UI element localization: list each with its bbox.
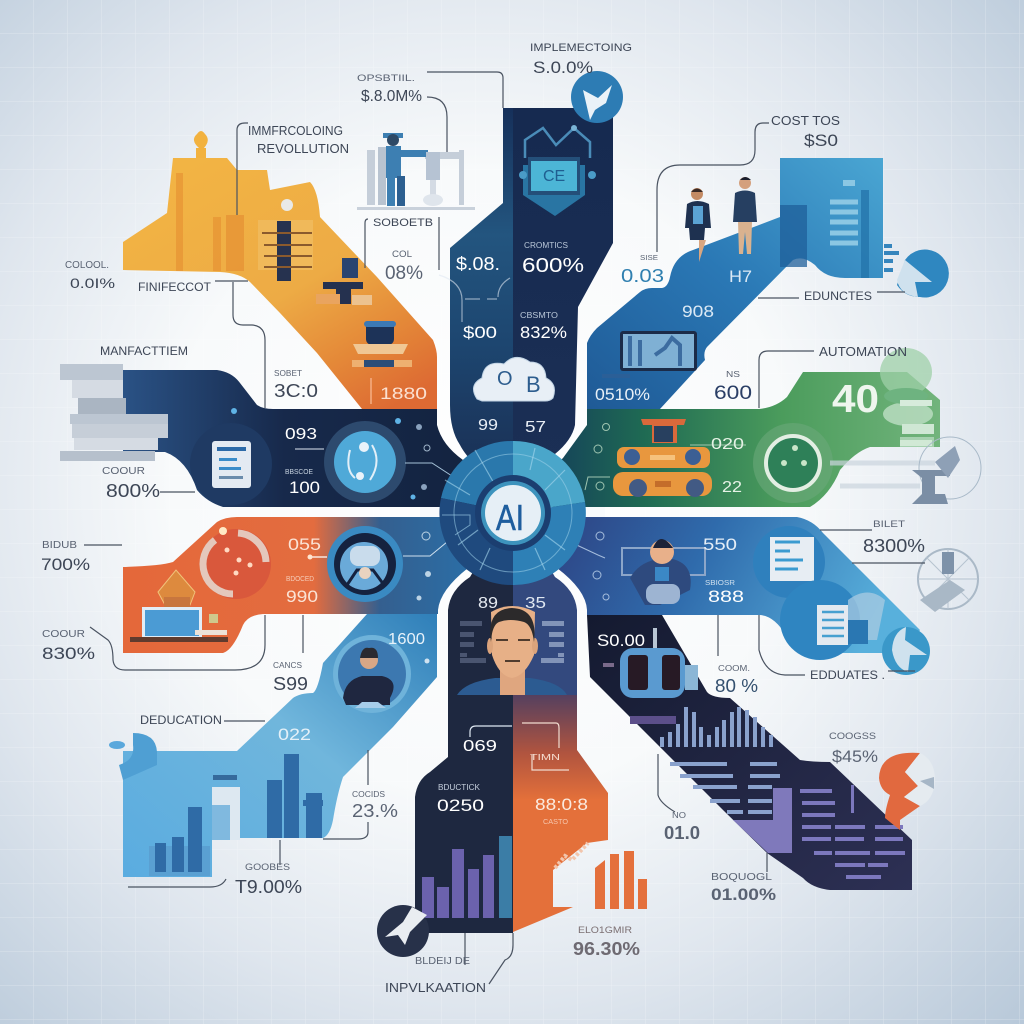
callout: col 08%: COL [392, 249, 412, 259]
values: 055, 990: BDOCED [286, 576, 314, 583]
mini bars right [541, 621, 564, 663]
value: 550, 888: 888 [708, 587, 744, 606]
callout: inpvlkaation: BLDEIJ DE [415, 956, 470, 967]
ring dots [566, 532, 609, 600]
callout: ns 600: NS [726, 370, 740, 379]
callout: col 08% [385, 249, 423, 284]
callout: coogss 45%: COOGSS [829, 731, 876, 742]
values: right column [520, 241, 584, 436]
values: right column: 57 [525, 419, 546, 436]
icon: pie badge, blue right [897, 249, 949, 297]
callout: canccs s99 [273, 615, 308, 694]
chart: purple bars [422, 836, 512, 918]
callout: boquogl 01.00%: BOQUOGL [711, 872, 773, 883]
callout: implementing: S.0.0% [533, 58, 593, 77]
value: 35: 35 [525, 595, 546, 612]
values: 069, 0250: 069 [463, 738, 497, 755]
callout: canccs s99: S99 [273, 674, 308, 694]
values: left column: $.08. [456, 254, 500, 274]
connector dots [231, 408, 452, 500]
icon: two people [685, 177, 757, 262]
callout: coom 80%: COOM. [718, 663, 750, 673]
callout: coom 80% [715, 615, 758, 696]
values: H7, 908, 0510%: 908 [682, 302, 714, 321]
callout: sobet 3c:0 [274, 369, 318, 401]
callout: coogss 45% [829, 731, 878, 766]
icon: VR headset [603, 628, 698, 698]
callout: colool: COLOOL. [65, 260, 109, 271]
callout: revolution: REVOLLUTION [257, 142, 349, 156]
values: 069, 0250: 0250 [437, 796, 484, 815]
values: right column: 832% [520, 323, 567, 342]
callout: edduates: EDDUATES . [810, 668, 885, 682]
callout: edunctes [758, 289, 905, 303]
icon: arrow badge, top [571, 71, 623, 123]
values: H7, 908, 0510% [595, 267, 752, 404]
icon: cloud: O [497, 368, 513, 390]
panel: right indigo arm [545, 517, 920, 660]
icon: document circle [190, 423, 272, 505]
white channels around hub [420, 507, 605, 517]
callout: implementing: IMPLEMECTOING [530, 42, 632, 54]
callout: bidub 700% [41, 540, 122, 574]
values: 1600, 022: 022 [278, 725, 311, 744]
ring dots [585, 424, 610, 490]
callout: bilet 8300%: 8300% [863, 536, 925, 556]
value: 89: 89 [478, 595, 498, 612]
values: 093 and 100: 100 [289, 478, 320, 497]
values: 88:0:8: TIMN [530, 753, 560, 762]
callout: bilet 8300% [820, 519, 925, 563]
ring dots [403, 532, 462, 600]
callout: implementing [530, 42, 632, 77]
chart: orange bars [595, 851, 647, 909]
values: 88:0:8: 88:0:8 [535, 795, 588, 814]
callout: sobet 3c:0: SOBET [274, 369, 302, 378]
panel: right blue arm [587, 158, 899, 409]
values: 020, 22, 40: 22 [722, 479, 742, 496]
center hub [439, 441, 586, 585]
chart: horizontal rows [630, 716, 905, 879]
panel: top center arm, right half [473, 108, 613, 470]
callout: no 01.0: 01.0 [664, 823, 700, 843]
callout: coccids 23.%: COCIDS [352, 790, 385, 799]
values: left column: $00 [463, 323, 497, 342]
callout: colool [65, 260, 115, 291]
callout: finifeccot: FINIFECCOT [138, 280, 212, 294]
panel: bottom center arm, right half [513, 560, 608, 932]
callout: manfactiem: MANFACTTIEM [100, 344, 188, 358]
values: 069, 0250 [437, 726, 512, 815]
callout: bilet 8300%: BILET [873, 519, 906, 529]
icon: robot helmet on stack [352, 321, 412, 367]
callout: opsbtiil: $.8.0M% [361, 88, 422, 105]
icon: helmet circle [327, 526, 403, 602]
callout: coour 800%: 800% [106, 481, 160, 501]
values: H7, 908, 0510%: 0510% [595, 385, 650, 404]
callout: ns 600: 600 [714, 383, 752, 404]
values: 88:0:8: CASTO [543, 819, 569, 826]
callout: automation: AUTOMATION [819, 344, 907, 359]
AI core [475, 475, 551, 551]
icon: arrow badge, right lower [882, 627, 930, 675]
panel: lower-right dark arm [587, 615, 912, 890]
callout: elo1gmir 96.30%: ELO1GMIR [578, 925, 633, 935]
callout: 0.03: SISE [640, 255, 658, 262]
callout: coour 830% [42, 615, 265, 670]
icon: bars in building [780, 180, 899, 278]
values: 020, 22, 40 [690, 378, 879, 496]
chart: skyline bars [149, 754, 323, 876]
callout: coom 80%: 80 % [715, 676, 758, 696]
callout line: implementing [427, 72, 503, 108]
icon: server rack [258, 199, 313, 281]
callout: ns 600 [714, 370, 752, 404]
icon: monitor with circuit: CE [543, 168, 565, 185]
icon: book circle [780, 580, 885, 660]
callout: 0.03: 0.03 [621, 266, 664, 286]
icon: orange robot cart [613, 419, 712, 497]
callout: soboetb: SOBOETB [373, 217, 433, 229]
panel: left orange arm [123, 517, 470, 653]
panel: top center arm, left half [439, 108, 513, 470]
callout: coogss 45%: $45% [832, 747, 878, 766]
callout: deducation: DEDUCATION [140, 713, 222, 727]
panel: left navy arm [60, 364, 480, 507]
callout: revolution: IMMFRCOLOING [248, 124, 343, 138]
value: 50.00: S0.00 [597, 631, 645, 650]
callout: automation [759, 344, 907, 408]
callout: edduates [759, 615, 915, 682]
values: left column [439, 254, 510, 434]
callout: cost tos: $S0 [804, 131, 838, 150]
callout: opsbtiil: OPSBTIIL. [357, 73, 415, 83]
callout: sobet 3c:0: 3C:0 [274, 381, 318, 401]
callout: coour 800% [102, 466, 195, 501]
callout: finifeccot [138, 280, 265, 408]
icon: gray machine and motion lines [830, 437, 981, 504]
value: 550, 888 [703, 535, 744, 606]
icon: green sphere stack [880, 348, 934, 447]
callout: goobes 79.00%: GOOBES [245, 862, 290, 872]
callout: revolution [237, 123, 349, 215]
panel: top-left orange manufacturing arm [123, 131, 437, 409]
callout: coour 830%: COOUR [42, 629, 85, 640]
callout: no 01.0: NO [672, 811, 686, 820]
callout: 0.03 [621, 255, 664, 286]
icon: portrait [457, 606, 567, 695]
values: 069, 0250: BDUCTICK [438, 783, 481, 792]
callout: coour 830%: 830% [42, 644, 95, 663]
values: H7, 908, 0510%: H7 [729, 267, 752, 286]
icon: portrait circle [333, 635, 411, 713]
panel: bottom center arm, left half [415, 560, 513, 933]
icon: tablet chart [602, 331, 697, 378]
icon: blue robot worker [357, 133, 475, 210]
panel: right green arm [545, 372, 940, 507]
callout: bidub 700%: 700% [41, 555, 90, 574]
icon: orange badge [879, 753, 935, 830]
icon: cloud [473, 357, 554, 401]
value: 550, 888: SBIOSR [705, 580, 735, 587]
callout: goobes 79.00% [128, 840, 302, 897]
icon: serrated orange edge [555, 843, 588, 868]
callout: opsbtiil [357, 73, 447, 152]
icon: green ring gauge [753, 423, 833, 503]
values: 093 and 100 [285, 426, 320, 497]
value: 550, 888: 550 [703, 535, 737, 554]
callout: bidub 700%: BIDUB [42, 540, 77, 551]
icon: cloud: B [526, 372, 541, 397]
callout: boquogl 01.00% [711, 853, 776, 904]
callout: col 08%: 08% [385, 263, 423, 284]
values: 055, 990 [286, 535, 327, 606]
AI core: AI [496, 497, 524, 538]
icon: crescent [109, 733, 157, 780]
icon: laptop and pagoda [130, 570, 228, 642]
callout: coccids 23.%: 23.% [352, 801, 398, 821]
callout: inpvlkaation: INPVLKAATION [385, 980, 486, 995]
callout: elo1gmir 96.30%: 96.30% [573, 939, 640, 959]
values: 055, 990: 055 [288, 535, 321, 554]
icon: document circle [753, 526, 825, 598]
icon: factory tower [176, 131, 244, 271]
callout: edunctes: EDUNCTES [804, 289, 872, 303]
callout: deducation [140, 713, 265, 727]
value: 1880 [370, 378, 427, 404]
mini bars left [460, 621, 486, 663]
callout: soboetb [365, 217, 439, 270]
callout: colool: 0.0I% [70, 275, 115, 291]
values: 1600, 022: 1600 [388, 631, 425, 648]
values: 093 and 100: 093 [285, 426, 317, 443]
callout: no 01.0 [658, 754, 700, 843]
icon: monitor with circuit [519, 125, 596, 216]
icon: arrow badge, bottom [377, 905, 429, 957]
callout: cost tos [657, 114, 840, 252]
callout: coccids 23.% [323, 750, 398, 839]
callout: coour 800%: COOUR [102, 466, 145, 477]
icon: red ring gauge [201, 527, 271, 599]
callout: elo1gmir 96.30% [573, 925, 640, 959]
icon: desk workstation [316, 258, 372, 305]
icon: gray turbine [918, 549, 978, 612]
values: 020, 22, 40: 40 [832, 378, 879, 421]
value: 1880: 1880 [380, 384, 427, 403]
values: left column: 99 [478, 417, 498, 434]
chart: thin bars [660, 707, 773, 747]
values: 88:0:8 [522, 723, 588, 826]
callout: inpvlkaation [385, 933, 513, 995]
icon: stacked slabs [60, 364, 168, 461]
callout: cost tos: COST TOS [771, 114, 840, 128]
callout: goobes 79.00%: T9.00% [235, 877, 302, 897]
values: 1600, 022 [278, 631, 430, 744]
values: right column: CROMTICS [524, 241, 568, 250]
values: right column: CBSMTO [520, 311, 558, 320]
callout: canccs s99: CANCS [273, 661, 302, 670]
callout: boquogl 01.00%: 01.00% [711, 885, 776, 904]
values: right column: 600% [522, 255, 584, 277]
values: 055, 990: 990 [286, 587, 318, 606]
icon: person at console [622, 539, 705, 605]
values: 093 and 100: BBSCOE [285, 469, 313, 476]
icon: blue gauge circle [324, 421, 406, 503]
values: 020, 22, 40: 020 [711, 436, 744, 453]
panel: lower-left light blue arm [109, 614, 437, 877]
